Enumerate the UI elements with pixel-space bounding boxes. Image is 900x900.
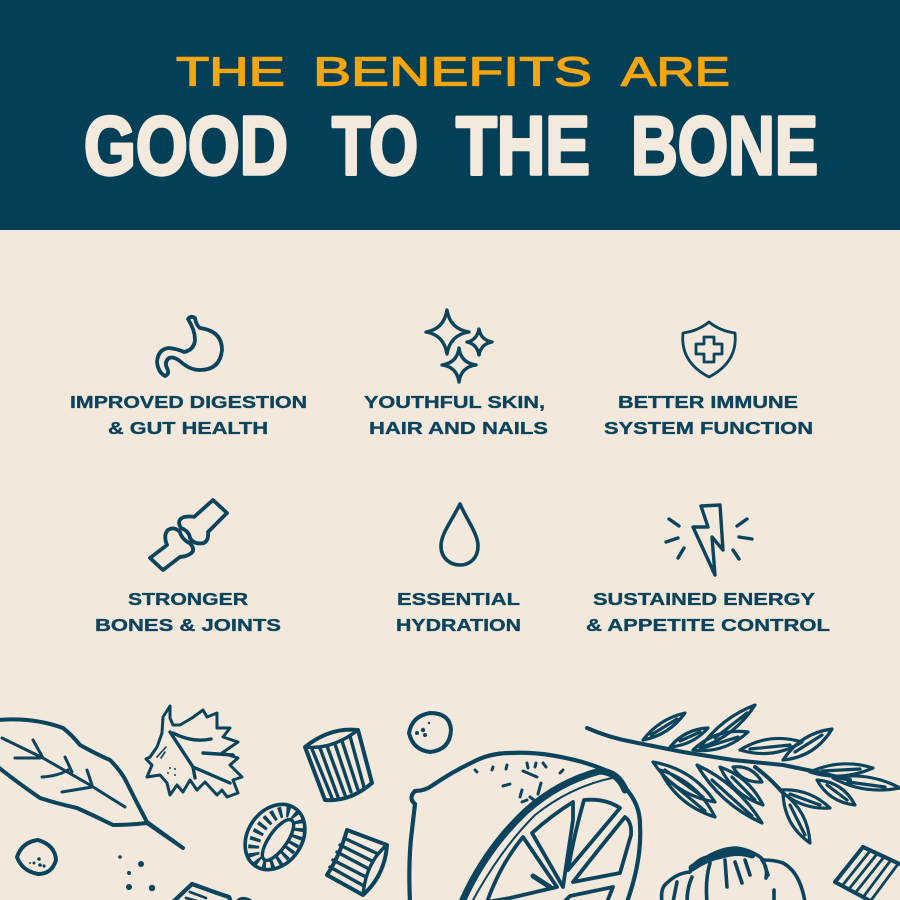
heading: good to the bone: GOOD bbox=[84, 99, 288, 192]
benefit: bones: STRONGER bbox=[128, 589, 248, 609]
leaf bbox=[0, 719, 183, 848]
heading: good to the bone: BONE bbox=[631, 99, 818, 192]
icon: joint bbox=[150, 500, 227, 570]
peppercorns bbox=[17, 713, 451, 891]
heading: the benefits are bbox=[176, 48, 730, 94]
icon: water drop bbox=[441, 504, 478, 565]
benefit: bones: BONES & JOINTS bbox=[95, 615, 281, 635]
benefit: digestion: IMPROVED DIGESTION bbox=[70, 392, 307, 412]
pasta tube tilted bbox=[327, 830, 387, 895]
benefit: energy: & APPETITE CONTROL bbox=[586, 615, 830, 635]
heading: the benefits are: THE bbox=[176, 48, 285, 94]
icon: shield bbox=[683, 322, 735, 377]
heading: good to the bone: TO bbox=[332, 99, 418, 192]
pasta tube bottom right bbox=[835, 847, 900, 900]
pasta ring bbox=[233, 793, 317, 881]
pasta tube upright bbox=[305, 730, 372, 800]
benefit: skin bbox=[364, 310, 548, 438]
cilantro leaf bbox=[146, 706, 242, 797]
garlic bbox=[662, 848, 805, 900]
heading: the benefits are: BENEFITS bbox=[313, 48, 592, 94]
benefit: skin: HAIR AND NAILS bbox=[369, 418, 548, 438]
benefit: digestion: & GUT HEALTH bbox=[108, 418, 268, 438]
benefit: skin: YOUTHFUL SKIN, bbox=[364, 392, 545, 412]
food illustration band bbox=[0, 705, 900, 900]
benefit: bones bbox=[95, 500, 281, 635]
benefit: energy: SUSTAINED ENERGY bbox=[593, 589, 815, 609]
pasta tube bottom left bbox=[173, 884, 250, 900]
heading: good to the bone: THE bbox=[456, 99, 590, 192]
header banner bbox=[0, 0, 900, 230]
rosemary sprig bbox=[587, 705, 900, 843]
benefit: digestion bbox=[70, 317, 307, 438]
benefit: hydration bbox=[396, 504, 521, 635]
icon: stomach bbox=[157, 317, 222, 376]
heading: good to the bone bbox=[84, 99, 818, 192]
icon: lightning bolt and rays bbox=[666, 505, 752, 575]
benefit: immune: BETTER IMMUNE bbox=[618, 392, 798, 412]
benefit: immune: SYSTEM FUNCTION bbox=[604, 418, 813, 438]
benefit: energy bbox=[586, 505, 830, 635]
benefit: hydration: ESSENTIAL bbox=[397, 589, 520, 609]
benefit: immune bbox=[604, 322, 813, 438]
icon: sparkles bbox=[426, 310, 492, 382]
lemon bbox=[409, 753, 640, 900]
heading: the benefits are: ARE bbox=[621, 48, 730, 94]
benefit: hydration: HYDRATION bbox=[396, 615, 521, 635]
